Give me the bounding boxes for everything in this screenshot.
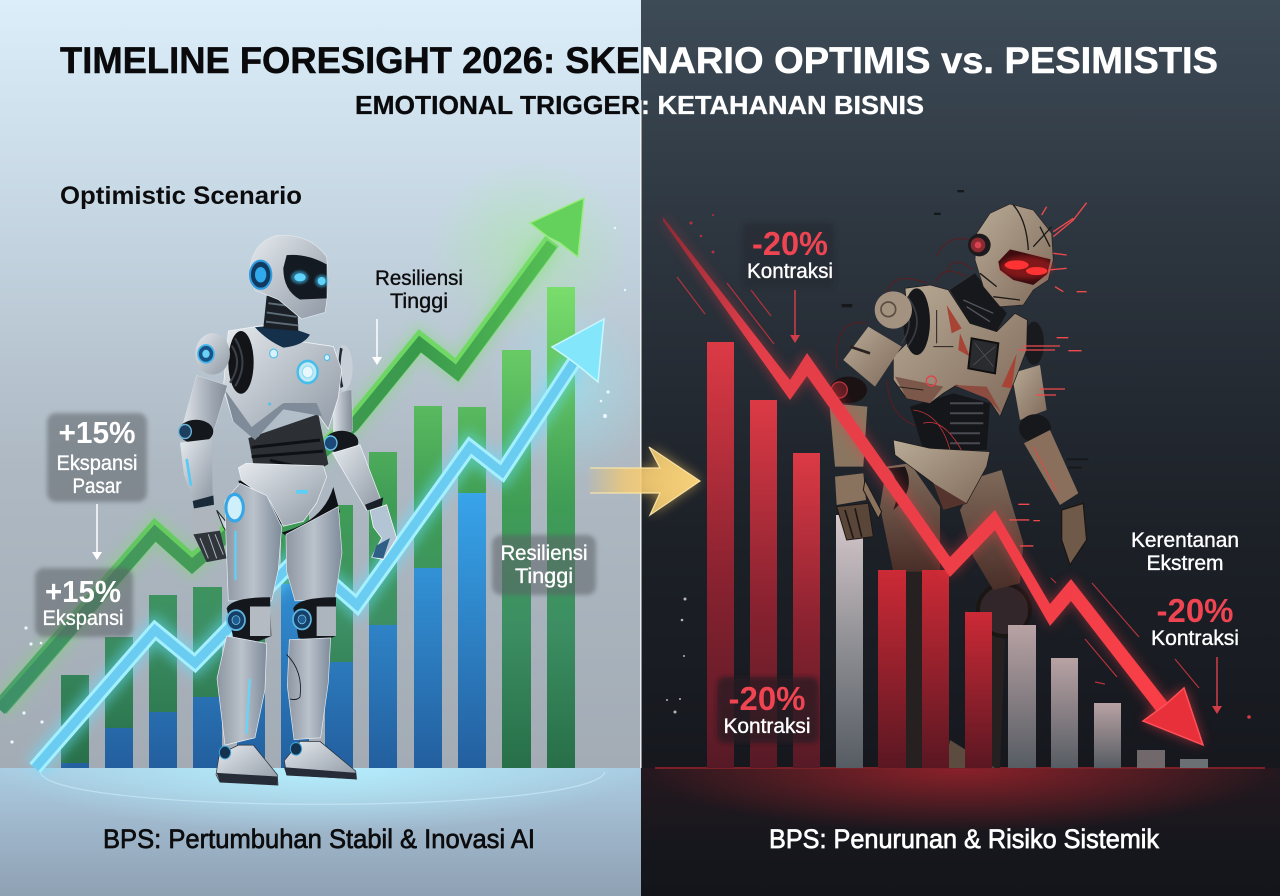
callout: +15% Ekspansi Pasar: [47, 413, 147, 502]
subtitle: EMOTIONAL TRIGGER: [355, 90, 640, 120]
callout: -20% Kontraksi top: Kontraksi: [747, 260, 833, 283]
arrow: resilience pointer down: [372, 319, 382, 365]
panel: optimistic scenario: [0, 0, 650, 896]
callout: Resiliensi Tinggi, black: Resiliensi: [375, 267, 463, 290]
arrow: contraction pointer right: [1212, 657, 1222, 714]
callout: +15% Ekspansi Pasar: Ekspansi: [56, 452, 138, 475]
right background: [641, 0, 1280, 896]
robot: damaged pessimistic robot: [829, 190, 1088, 768]
callout: +15% Ekspansi Pasar: Pasar: [72, 475, 122, 498]
robot near arm: [179, 331, 254, 562]
arrow: blue growth line: [35, 319, 604, 768]
left background: [0, 0, 641, 896]
callout: +15% Ekspansi: Ekspansi: [42, 607, 124, 630]
arrow: contraction pointer top: [790, 290, 800, 343]
robot far arm: [324, 345, 397, 559]
robot pelvis and hips: [238, 463, 340, 542]
damaged pelvis: [893, 440, 990, 510]
callout: +15% Ekspansi: +15%: [45, 574, 121, 609]
callout: Kerentanan Ekstrem: Ekstrem: [1146, 552, 1224, 575]
caption: BPS pessimistic: BPS: Penurunan & Risiko Sistemik: [769, 824, 1159, 854]
robot torso: [223, 325, 342, 440]
robot legs: [217, 483, 342, 745]
divider line: [640, 100, 642, 768]
title: TIMELINE FORESIGHT 2026: SKE: [60, 40, 640, 81]
streak lines: [677, 277, 1199, 688]
callout: Kerentanan Ekstrem: [1131, 529, 1239, 575]
callout: -20% Kontraksi lower left: -20%: [728, 680, 806, 717]
callout: -20% Kontraksi right: -20%: [1156, 592, 1234, 629]
damaged head: [968, 204, 1053, 307]
bar chart: short falling bars: [878, 570, 1208, 768]
sparks right: [666, 214, 1251, 719]
red damage sparks: [1009, 203, 1087, 546]
caption: BPS optimistic: BPS: Pertumbuhan Stabil & Inovasi AI: [103, 824, 535, 854]
text: optimistic scenario label: Optimistic Scenario: [60, 182, 302, 210]
robot neck: [263, 296, 298, 331]
robot: optimistic silver robot: [179, 235, 397, 785]
damaged lower legs: [878, 570, 1030, 768]
robot feet: [216, 741, 357, 785]
callout: -20% Kontraksi lower left: Kontraksi: [724, 715, 810, 738]
panel: pessimistic scenario: [641, 0, 1280, 896]
arrow: green growth line: [0, 198, 584, 710]
callout: +15% Ekspansi Pasar: +15%: [58, 415, 136, 450]
robot head: [250, 235, 328, 319]
arrow: callout pointer down: [92, 504, 102, 560]
damaged neck: [950, 273, 1007, 332]
callout: -20% Kontraksi right: [1151, 592, 1239, 650]
callout: -20% Kontraksi right: Kontraksi: [1151, 627, 1239, 650]
callout: Resiliensi Tinggi, black: [375, 267, 463, 313]
damaged near arm: [829, 288, 930, 540]
arrow: red decline line: [663, 217, 1203, 745]
damaged thighs: [880, 463, 1023, 590]
title: NARIO OPTIMIS vs. PESIMISTIS: [641, 40, 1218, 81]
damaged far arm: [1012, 322, 1087, 565]
callout: Kerentanan Ekstrem: Kerentanan: [1131, 529, 1239, 552]
callout: -20% Kontraksi top: -20%: [752, 225, 828, 262]
damaged midriff: [910, 393, 990, 453]
callout: Resiliensi Tinggi, white: [492, 535, 596, 595]
damaged torso: [893, 285, 1027, 417]
arrow: transition gold arrow: [585, 447, 700, 515]
bar chart: tall falling bars: [707, 342, 863, 768]
callout: Resiliensi Tinggi, white: Resiliensi: [500, 542, 588, 565]
sparkles: [10, 227, 626, 744]
callout: -20% Kontraksi top: [742, 222, 835, 288]
callout: +15% Ekspansi: [35, 568, 133, 637]
bar chart: growth bars: [61, 287, 575, 768]
callout: Resiliensi Tinggi, white: Tinggi: [515, 565, 573, 588]
callout: -20% Kontraksi lower left: [717, 677, 819, 743]
subtitle: : KETAHANAN BISNIS: [641, 90, 924, 120]
robot midriff: [248, 414, 328, 475]
damaged wires: [836, 239, 983, 437]
callout: Resiliensi Tinggi, black: Tinggi: [390, 290, 448, 313]
